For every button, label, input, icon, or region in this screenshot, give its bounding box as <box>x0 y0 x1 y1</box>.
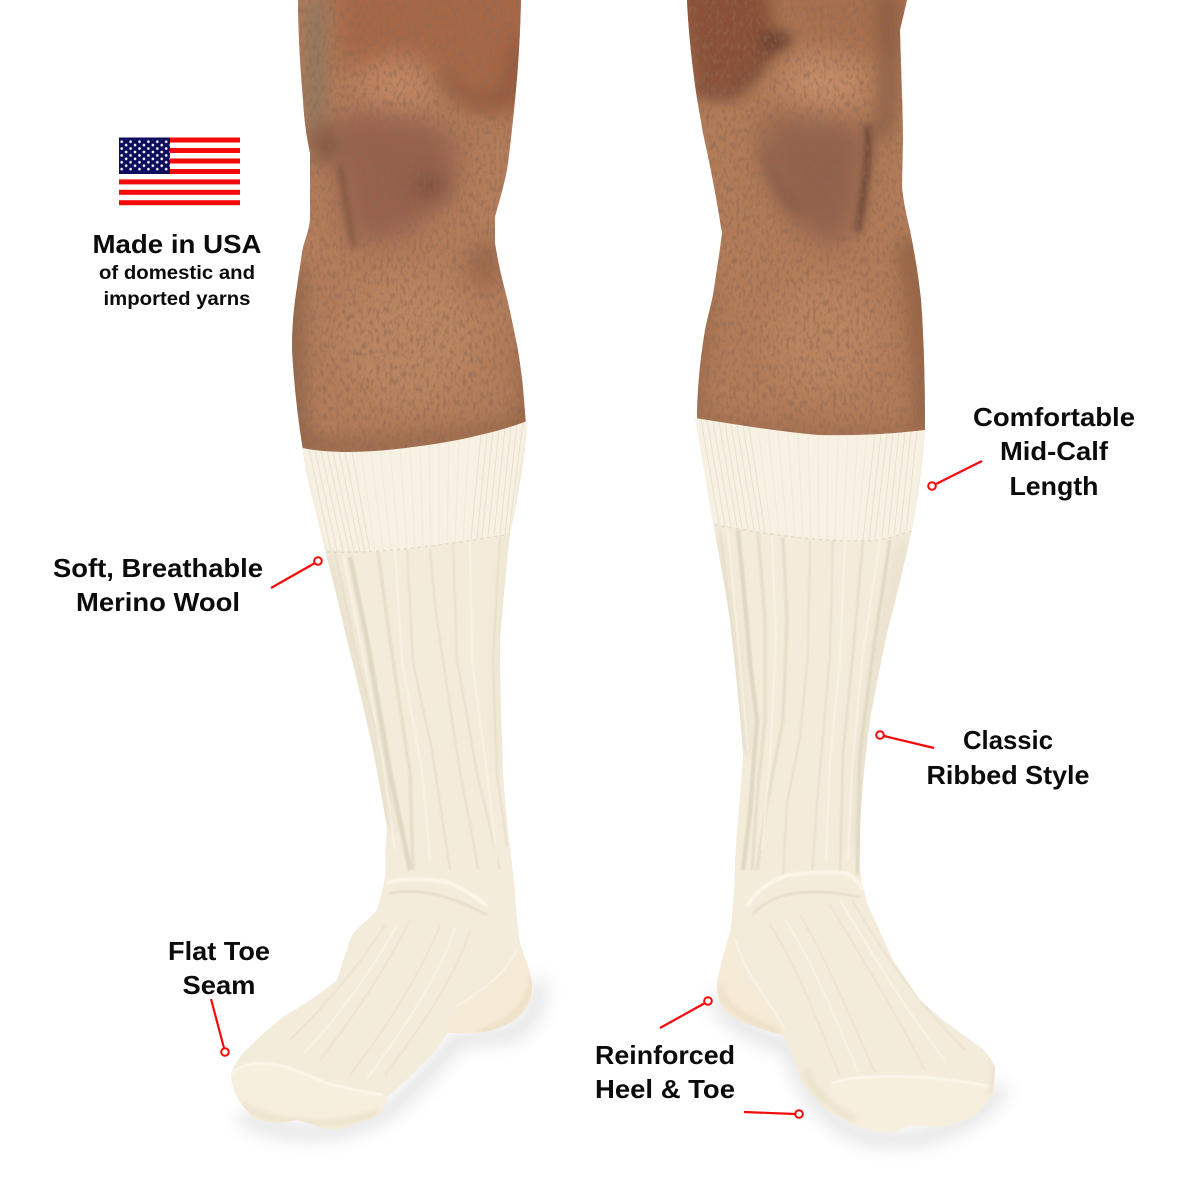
icon: american flag <box>119 137 240 206</box>
text: made in USA: of domestic and <box>99 263 255 284</box>
callout: flat toe seam <box>168 936 270 1056</box>
callout: comfortable mid-calf length: Mid-Calf <box>1000 436 1108 466</box>
callout: soft breathable merino wool: Merino Wool <box>76 587 240 617</box>
left sock edge shading <box>326 556 390 826</box>
text: made in USA: imported yarns <box>104 289 250 310</box>
callout: flat toe seam: Flat Toe <box>168 936 270 966</box>
callout: classic ribbed style: Classic <box>963 725 1053 755</box>
left sock heel <box>457 960 531 1008</box>
left sock cuff <box>302 421 527 552</box>
callout: comfortable mid-calf length <box>928 402 1135 501</box>
callout: reinforced heel and toe <box>595 997 803 1118</box>
left sock ribs <box>335 535 507 870</box>
callout: flat toe seam: Seam <box>182 970 256 1000</box>
callout: comfortable mid-calf length: Length <box>1010 471 1098 501</box>
right sock ankle fold <box>747 872 863 915</box>
text: made in USA: Made in USA <box>92 229 262 259</box>
callout: soft breathable merino wool: Soft, Breathable <box>53 553 263 583</box>
left leg <box>292 0 526 452</box>
right sock <box>695 418 995 1133</box>
right leg <box>687 0 925 436</box>
left sock foot ribs <box>290 920 470 1075</box>
foot shadows <box>245 985 1000 1139</box>
callout: comfortable mid-calf length: Comfortable <box>973 402 1135 432</box>
right sock toe <box>825 1076 1000 1140</box>
right knee colour modelling <box>670 0 927 433</box>
left sock ankle fold <box>387 879 487 915</box>
callout: classic ribbed style: Ribbed Style <box>926 760 1090 790</box>
callout: reinforced heel and toe: Reinforced <box>595 1040 735 1070</box>
callout: soft breathable merino wool <box>53 553 322 617</box>
right sock heel <box>717 961 722 989</box>
text: made in USA <box>92 229 262 310</box>
right sock edge shading <box>715 535 905 850</box>
left sock <box>231 421 532 1130</box>
callout: reinforced heel and toe: Heel & Toe <box>595 1074 735 1104</box>
right sock foot ribs <box>770 900 965 1075</box>
right sock cuff <box>695 418 925 540</box>
callout: classic ribbed style <box>876 725 1090 790</box>
left sock toe <box>230 1063 390 1135</box>
left knee colour modelling <box>293 0 540 450</box>
right sock ribs <box>720 530 890 875</box>
